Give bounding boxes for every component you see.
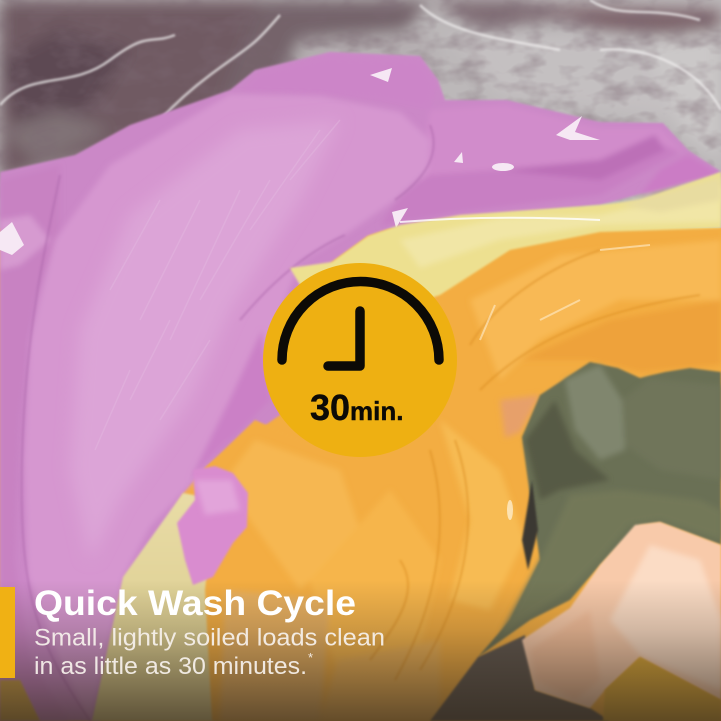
yellow cloth corner bbox=[603, 657, 721, 721]
cream wedge bbox=[92, 493, 230, 721]
badge: 30 minute clock bbox=[263, 263, 457, 457]
peach fabric bbox=[522, 522, 721, 708]
pale yellow fabric bbox=[290, 172, 721, 300]
pink highlights bbox=[0, 68, 600, 255]
description text: Small, lightly soiled loads clean bbox=[34, 624, 385, 652]
heading: Quick Wash Cycle bbox=[34, 584, 356, 623]
description text: in as little as 30 minutes. bbox=[34, 653, 307, 680]
pink main body bbox=[24, 94, 430, 721]
orange folds bbox=[205, 228, 721, 721]
accent bar bbox=[0, 587, 15, 678]
description text: * bbox=[308, 650, 313, 665]
orange base under fabrics bbox=[0, 228, 721, 721]
description text bbox=[34, 624, 385, 680]
grey floor bbox=[430, 635, 610, 721]
pink streak texture bbox=[95, 120, 340, 450]
olive green fabric bbox=[478, 362, 721, 657]
icon: clock arc and hands bbox=[282, 282, 439, 366]
bottom dark gradient bbox=[0, 580, 721, 721]
label: 30 min.: 30min. bbox=[310, 387, 404, 428]
pink knot bbox=[177, 466, 248, 585]
left corner cloth bbox=[0, 680, 40, 721]
water background bbox=[0, 0, 721, 228]
